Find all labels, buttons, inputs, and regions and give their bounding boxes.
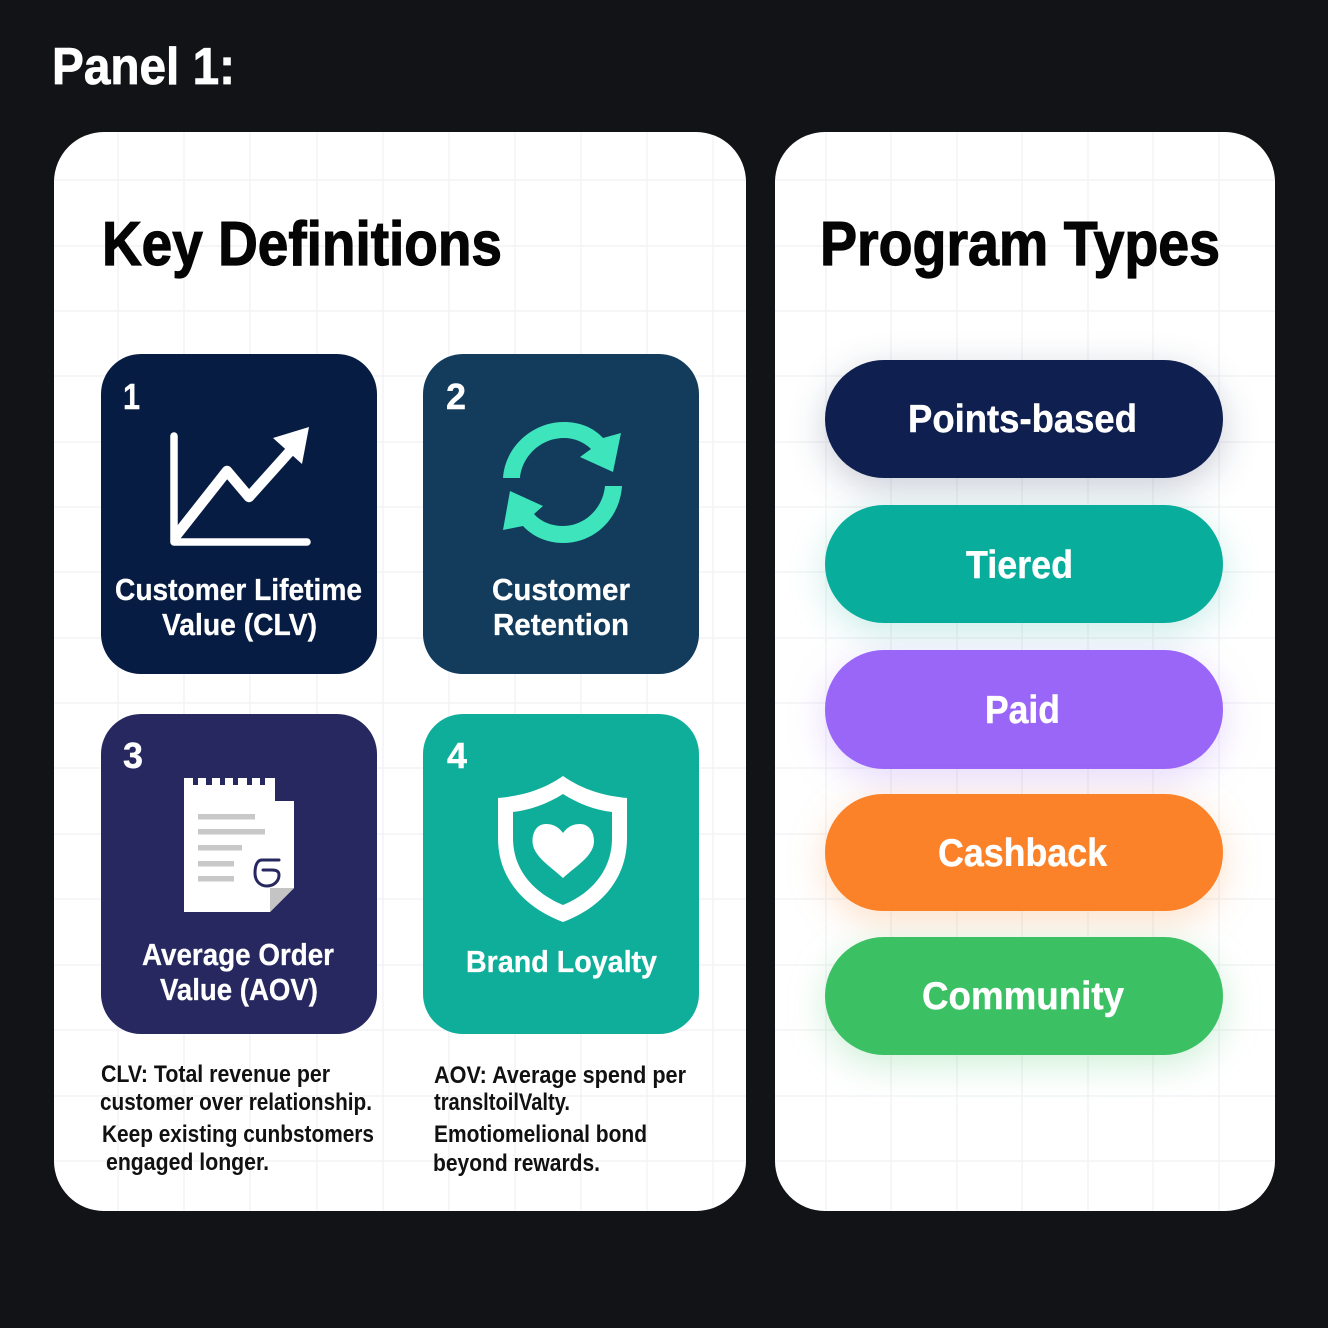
card 4: brand loyalty [423, 714, 699, 1034]
card number 3: 3 [123, 735, 143, 776]
definitions text: left column: Keep existing cunbstomers [102, 1121, 374, 1148]
title: Panel 1: [52, 38, 235, 96]
card number 2: 2 [446, 376, 466, 417]
definitions text: right column: Emotiomelional bond [434, 1121, 647, 1148]
card label [142, 937, 334, 1007]
card label: Brand Loyalty [466, 944, 658, 979]
card 1: customer lifetime value [101, 354, 377, 674]
card label: Value (AOV) [160, 972, 318, 1007]
icon: shield with heart [498, 776, 627, 922]
card label: Customer Lifetime [115, 572, 362, 607]
pill: paid: Paid [985, 689, 1060, 732]
pill: community [825, 937, 1223, 1055]
icon: receipt [184, 778, 294, 912]
panel: key definitions [54, 132, 746, 1211]
definitions text: right column: AOV: Average spend per [434, 1062, 686, 1089]
pill: cashback [825, 794, 1223, 911]
definitions text: left column [100, 1061, 374, 1176]
heading: key definitions: Key Definitions [102, 210, 502, 279]
card label: Average Order [142, 937, 334, 972]
heading: program types: Program Types [820, 210, 1220, 279]
card label: Customer [492, 572, 630, 607]
pill: community: Community [922, 975, 1124, 1018]
card 3: average order value [101, 714, 377, 1034]
pill: tiered: Tiered [966, 544, 1073, 587]
card label: Value (CLV) [162, 607, 317, 642]
card label: Retention [493, 607, 629, 642]
panel: program types [775, 132, 1275, 1211]
definitions text: right column: transltoilValty. [434, 1089, 570, 1116]
definitions text: left column: engaged longer. [106, 1149, 269, 1176]
definitions text: left column: customer over relationship. [100, 1089, 372, 1116]
definitions text: left column: CLV: Total revenue per [101, 1061, 330, 1088]
icon: growth chart [174, 427, 309, 542]
pill: points-based: Points-based [908, 398, 1137, 441]
pill: tiered [825, 505, 1223, 623]
card number 1: 1 [123, 376, 140, 417]
pill: paid [825, 650, 1223, 769]
pill: cashback: Cashback [938, 832, 1107, 875]
card label [492, 572, 630, 642]
definitions text: right column [433, 1062, 686, 1177]
card number 4: 4 [447, 735, 467, 776]
pill: points-based [825, 360, 1223, 478]
definitions text: right column: beyond rewards. [433, 1150, 600, 1177]
card label [115, 572, 362, 642]
card 2: customer retention [423, 354, 699, 674]
icon: refresh arrows [503, 422, 622, 543]
